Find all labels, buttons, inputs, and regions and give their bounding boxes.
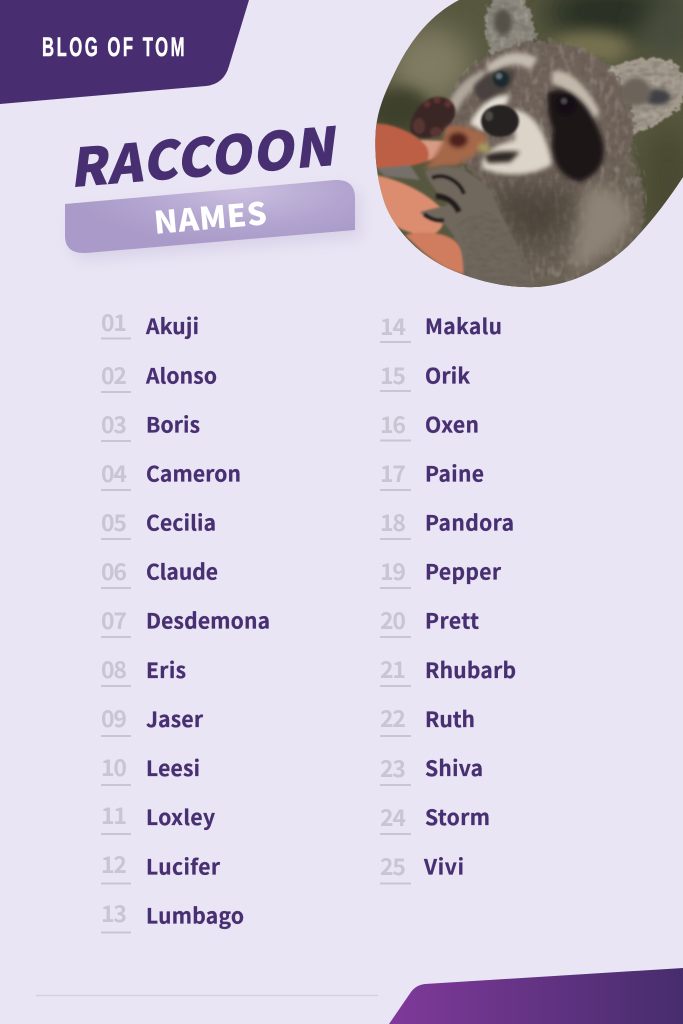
item 05: 05 — [101, 504, 127, 538]
item 10 — [101, 749, 200, 785]
item 04: 04 — [101, 455, 127, 489]
item 25: Vivi — [423, 852, 464, 882]
raised paw — [410, 96, 455, 138]
item 14 — [380, 308, 502, 342]
item 07: Desdemona — [146, 606, 270, 636]
item 10: Leesi — [146, 753, 200, 783]
item 09: 09 — [101, 700, 127, 734]
forehead highlights — [450, 53, 600, 122]
item 11 — [101, 797, 215, 834]
item 08 — [101, 651, 186, 686]
item 21 — [380, 651, 516, 686]
item 12 — [101, 846, 221, 884]
item 22: Ruth — [425, 704, 475, 734]
holding paw — [420, 166, 532, 295]
item 18: Pandora — [425, 508, 514, 538]
item 25: 25 — [380, 848, 406, 882]
item 01: 01 — [101, 304, 127, 338]
item 10: 10 — [101, 749, 127, 783]
item 24: 24 — [380, 799, 406, 833]
mouth — [484, 151, 520, 163]
item 23 — [380, 750, 483, 785]
item 20: 20 — [380, 602, 406, 636]
left eye patch — [474, 70, 514, 101]
item 02 — [101, 357, 217, 392]
item 03: 03 — [101, 406, 127, 440]
item 24 — [380, 799, 490, 834]
item 18: 18 — [380, 504, 406, 538]
item 08: Eris — [146, 655, 186, 685]
names list: left column — [101, 304, 270, 932]
item 02: Alonso — [145, 360, 217, 390]
names list: right column — [380, 308, 516, 884]
item 06 — [101, 553, 218, 588]
item 03: Boris — [146, 410, 200, 440]
title: raccoon: RACCOON — [69, 105, 343, 203]
item 07 — [101, 602, 270, 637]
nose — [481, 105, 519, 137]
light fur texture — [454, 0, 676, 282]
item 06: 06 — [101, 553, 127, 587]
item 13: Lumbago — [146, 900, 244, 930]
item 16 — [380, 406, 479, 440]
item 19: Pepper — [425, 556, 502, 586]
blog name: BLOG OF TOM — [42, 32, 185, 62]
footer banner — [389, 968, 683, 1024]
ear insides — [494, 9, 671, 106]
item 22: 22 — [380, 700, 406, 734]
item 20 — [380, 602, 479, 637]
item 15: 15 — [380, 357, 406, 391]
eyes — [493, 71, 576, 115]
ear left — [486, 0, 538, 62]
item 21: 21 — [380, 651, 406, 685]
muzzle white — [470, 95, 552, 174]
item 16: 16 — [380, 406, 406, 440]
item 15: Orik — [425, 360, 470, 390]
item 02: 02 — [101, 357, 127, 391]
item 20: Prett — [425, 606, 479, 636]
item 14: 14 — [380, 308, 406, 342]
item 06: Claude — [146, 556, 218, 586]
item 11: Loxley — [146, 802, 215, 832]
item 24: Storm — [425, 802, 490, 832]
item 12: Lucifer — [146, 852, 221, 882]
item 08: 08 — [101, 651, 127, 685]
item 23: 23 — [380, 750, 406, 784]
body — [454, 154, 646, 288]
item 01: Akuji — [145, 311, 199, 341]
item 11: 11 — [101, 797, 127, 831]
item 12: 12 — [101, 846, 127, 880]
food — [425, 126, 490, 170]
raccoon fur base — [445, 0, 683, 295]
item 13: 13 — [101, 895, 127, 929]
subtitle text: NAMES — [152, 188, 268, 243]
item 05: Cecilia — [146, 508, 216, 538]
item 17: Paine — [425, 458, 484, 488]
right eye mask — [547, 90, 604, 182]
item 09 — [101, 700, 204, 736]
photo: raccoon in blob frame — [370, 0, 683, 295]
item 05 — [101, 504, 216, 539]
item 17 — [380, 455, 484, 490]
item 01 — [101, 304, 199, 341]
head — [449, 40, 637, 179]
item 19 — [380, 553, 502, 588]
item 14: Makalu — [425, 311, 502, 341]
item 18 — [380, 504, 514, 539]
item 13 — [101, 895, 244, 932]
item 22 — [380, 700, 475, 736]
item 04 — [101, 455, 241, 490]
item 09: Jaser — [146, 704, 204, 734]
item 15 — [380, 357, 470, 391]
item 17: 17 — [380, 455, 406, 489]
item 07: 07 — [101, 602, 127, 636]
item 25 — [380, 848, 464, 884]
item 03 — [101, 406, 200, 441]
item 19: 19 — [380, 553, 406, 587]
subtitle band: names — [65, 180, 361, 260]
chest shadow — [492, 176, 574, 250]
fur texture — [462, 2, 682, 283]
paw fur texture — [474, 220, 524, 266]
fingers — [370, 124, 464, 274]
footer rule — [36, 994, 378, 996]
item 23: Shiva — [425, 753, 483, 783]
item 16: Oxen — [425, 410, 479, 440]
item 21: Rhubarb — [425, 655, 516, 685]
ear right — [606, 58, 683, 136]
header banner — [0, 0, 249, 104]
item 04: Cameron — [146, 458, 241, 488]
